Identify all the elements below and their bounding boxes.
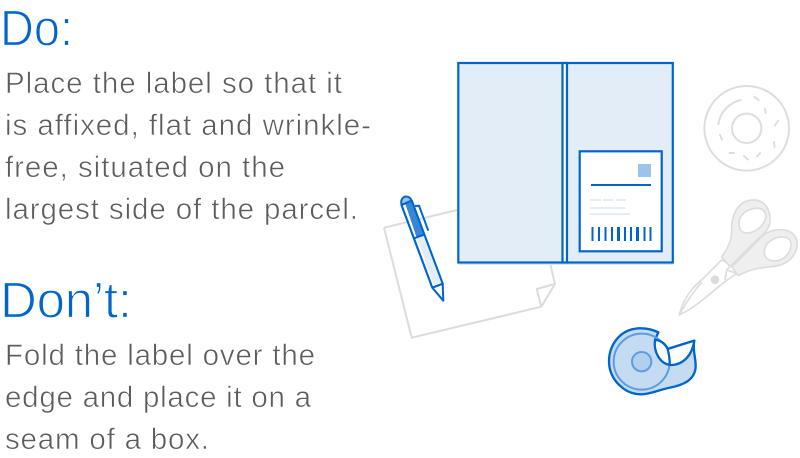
text block: do instructions (5, 67, 371, 226)
text block: do instructions: free, situated on the (5, 151, 285, 184)
text block: don't instructions (5, 339, 315, 456)
icon: parcel with label (458, 63, 673, 265)
parcel box (458, 63, 673, 265)
text block: do instructions: is affixed, flat and wrinkle- (5, 109, 371, 142)
text block: do instructions: Place the label so that it (5, 67, 342, 100)
handles (722, 200, 770, 267)
icon: scissors (679, 200, 797, 315)
text block: don't instructions: edge and place it on a (5, 381, 312, 414)
shipping label (580, 151, 662, 251)
heading: Don't: Don’t: (0, 272, 132, 328)
text block: do instructions: largest side of the parcel. (5, 193, 358, 226)
icon: donut (704, 86, 789, 171)
text block: don't instructions: seam of a box. (5, 423, 209, 456)
heading: Do: Do: (0, 0, 73, 56)
blades (679, 260, 737, 315)
icon: sheet of paper (384, 210, 555, 338)
barcode (592, 227, 652, 241)
icon: tape dispenser (609, 328, 696, 394)
text block: don't instructions: Fold the label over the (5, 339, 315, 372)
icon: pen (401, 196, 443, 301)
